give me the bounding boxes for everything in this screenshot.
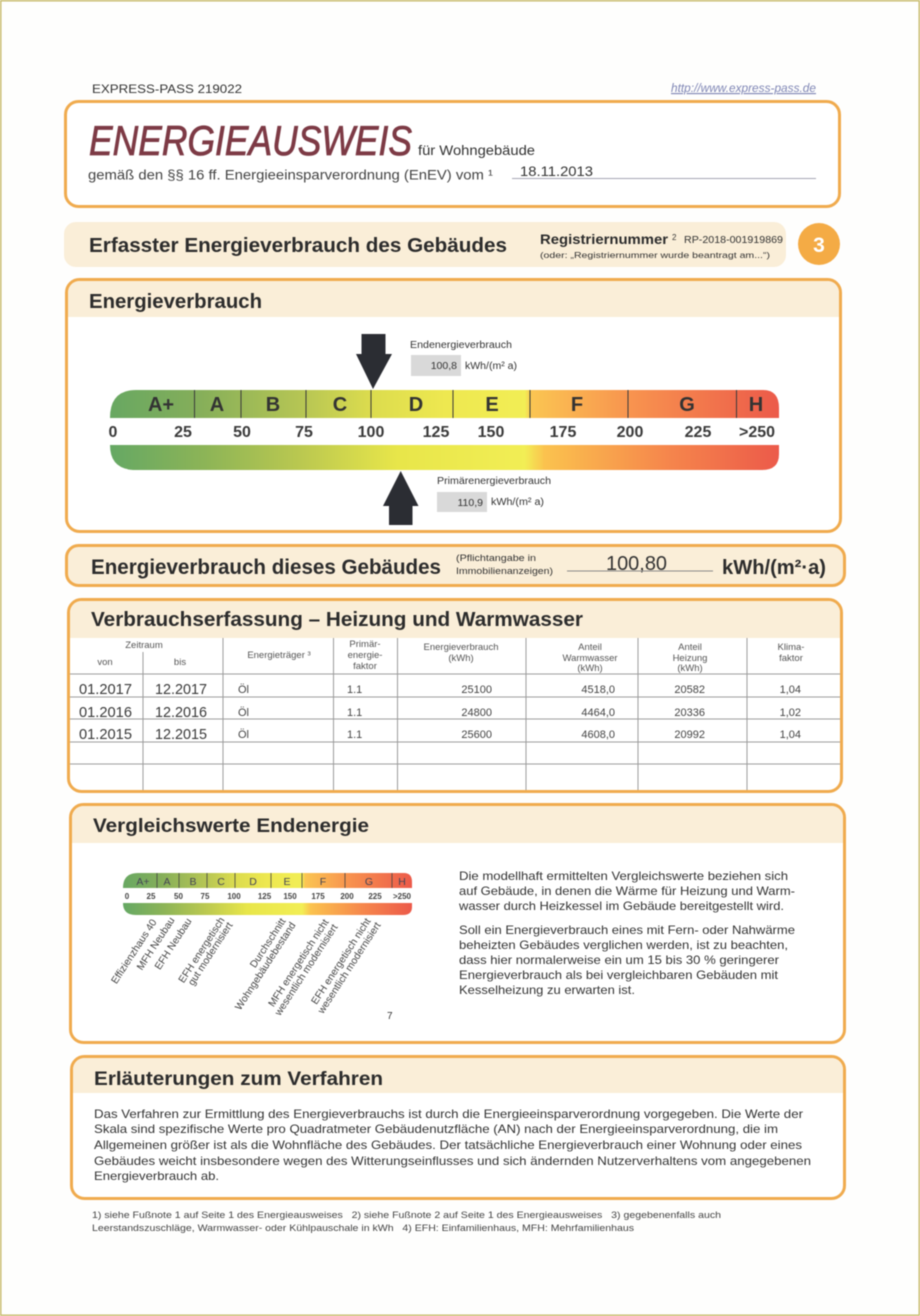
table row 2015: 12.2015 <box>155 726 207 743</box>
energy class bar: F <box>571 394 583 416</box>
footnotes <box>92 1210 721 1234</box>
rotated comparison labels: EFH energetisch <box>177 916 228 985</box>
table header: (kWh) <box>577 663 603 674</box>
mini class bar: G <box>365 876 373 888</box>
table header: Heizung <box>673 653 707 664</box>
scale numbers: 75 <box>295 424 313 441</box>
heading: Verbrauchserfassung: Verbrauchserfassung – Heizung und Warmwasser <box>91 608 583 631</box>
table grid <box>70 638 840 790</box>
registration number: Registriernummer <box>540 231 669 247</box>
text: comparison explanation: auf Gebäude, in denen die Wärme für Heizung und Warm- <box>459 885 795 898</box>
text: comparison explanation: dass hier normalerweise ein um 15 bis 30 % geringerer <box>459 954 779 967</box>
table row 2016: 01.2016 <box>79 704 132 721</box>
gradient bar <box>110 445 779 470</box>
label: Endenergieverbrauch value: 100,8 <box>431 360 457 372</box>
footnote marker: 7 <box>387 1011 393 1022</box>
mini class bar: E <box>283 876 291 888</box>
table row 2016: 24800 <box>461 707 492 719</box>
arrow: Endenergie down <box>356 334 392 389</box>
table header: Anteil <box>578 642 602 653</box>
mini class bar: C <box>217 876 225 888</box>
heading: Erläuterungen: Erläuterungen zum Verfahren <box>94 1068 383 1090</box>
panel: Energieverbrauch dieses Gebäudes <box>66 546 844 586</box>
rotated comparison labels: Durchschnitt <box>248 917 289 970</box>
table row 2017: Öl <box>238 684 249 696</box>
table row 2016: 20336 <box>674 707 705 719</box>
text: comparison explanation: Kesselheizung zu erwarten ist. <box>459 984 635 997</box>
table row 2015: 20992 <box>674 729 705 741</box>
heading: Energieausweis: ENERGIEAUSWEIS <box>89 117 412 164</box>
page number badge <box>798 223 840 265</box>
table row 2016: 1,02 <box>780 707 801 719</box>
text: procedure explanation: Allgemeinen größer ist als die Wohnfläche des Gebäudes. Der tatsächliche Energieverbrauch einer Wohnung oder eines <box>94 1138 802 1152</box>
energy class bar: A+ <box>148 394 174 416</box>
table header: Energieverbrauch <box>424 642 498 653</box>
table header: faktor <box>779 653 803 664</box>
mini gradient bar <box>123 903 412 915</box>
mini class bar: A <box>163 876 171 888</box>
rotated comparison labels <box>110 916 384 1019</box>
scale numbers: 0 <box>109 424 118 441</box>
rotated comparison labels: EFH energetisch nicht <box>310 917 374 1007</box>
value: 100,80: 100,80 <box>606 553 667 575</box>
page header: pass number and link: EXPRESS-PASS 219022 <box>92 82 242 96</box>
table header: (kWh) <box>448 653 474 664</box>
table header: bis <box>174 657 186 668</box>
table row 2017: 20582 <box>674 684 705 696</box>
text: procedure explanation: Das Verfahren zur Ermittlung des Energieverbrauchs ist durch die Energieeinsparverordnung vorgegeben. Die Werte der <box>94 1107 803 1121</box>
table row 2017: 25100 <box>461 684 492 696</box>
table row 2016: 4464,0 <box>581 707 615 719</box>
table row 2015 <box>79 726 801 743</box>
scale numbers: 50 <box>233 424 251 441</box>
table row 2017: 01.2017 <box>79 681 132 698</box>
page number badge: 3 <box>813 234 825 257</box>
energy class bar: C <box>333 394 347 416</box>
table row 2017: 12.2017 <box>155 681 207 698</box>
note: Pflichtangabe: Immobilienanzeigen) <box>456 566 553 576</box>
table row 2016: Öl <box>238 707 249 719</box>
scale numbers: 200 <box>617 424 643 441</box>
text: comparison explanation: beheizten Gebäudes verglichen werden, ist zu beachten, <box>459 939 788 952</box>
table header: Energieträger ³ <box>247 650 311 661</box>
table header <box>97 639 804 674</box>
rotated comparison labels: EFH Neubau <box>153 917 195 972</box>
mini class bar: B <box>189 876 197 888</box>
panel: Energieverbrauch scale <box>66 280 840 532</box>
panel: Verbrauchserfassung table <box>68 600 842 792</box>
registration number <box>540 231 783 260</box>
note: Pflichtangabe <box>456 553 553 576</box>
table header: Warmwasser <box>562 653 618 664</box>
scale numbers: 125 <box>423 424 449 441</box>
mini class bar: A+ <box>136 876 150 888</box>
note: Pflichtangabe: (Pflichtangabe in <box>456 553 536 563</box>
mini class bar: F <box>320 876 326 888</box>
scale numbers: 25 <box>174 424 192 441</box>
text: comparison explanation: Die modellhaft ermittelten Vergleichswerte beziehen sich <box>459 870 788 883</box>
label: Primärenergieverbrauch value: Primärenergieverbrauch <box>437 476 551 487</box>
panel: Erläuterungen zum Verfahren <box>72 1056 844 1198</box>
mini scale numbers: 25 <box>147 892 156 901</box>
page header: pass number and link <box>92 82 816 96</box>
text: comparison explanation <box>458 870 795 997</box>
table header: Zeitraum <box>125 640 163 651</box>
rotated comparison labels: Effizienzhaus 40 <box>110 917 160 986</box>
mini scale numbers: 225 <box>368 892 382 901</box>
table row 2015: 01.2015 <box>79 726 132 743</box>
label: Endenergieverbrauch value: Endenergieverbrauch <box>410 340 512 351</box>
rotated comparison labels: wesentlich modernisiert <box>316 921 384 1017</box>
table header: Anteil <box>678 642 702 653</box>
text: procedure explanation: Energieverbrauch ab. <box>94 1169 219 1183</box>
mini scale numbers: 100 <box>227 892 241 901</box>
text: procedure explanation <box>94 1107 811 1183</box>
table header: Primär- <box>349 639 381 650</box>
mini scale numbers: >250 <box>393 892 412 901</box>
scale numbers: >250 <box>739 424 775 441</box>
footnotes: Leerstandszuschläge, Warmwasser- oder Kühlpauschale in kWh 4) EFH: Einfamilienhaus, MFH: Mehrfamilienhaus <box>92 1223 634 1234</box>
table row 2016: 12.2016 <box>155 704 207 721</box>
mini scale numbers: 125 <box>258 892 272 901</box>
energy class bar: A <box>210 394 224 416</box>
energy class bar: D <box>409 394 423 416</box>
energy class bar: E <box>485 394 499 416</box>
mini scale numbers: 150 <box>283 892 297 901</box>
mini scale numbers: 75 <box>201 892 210 901</box>
scale numbers: 150 <box>478 424 504 441</box>
heading: Erfasster Energieverbrauch des Gebäudes: Erfasster Energieverbrauch des Gebäudes <box>89 235 507 257</box>
heading: building consumption: Energieverbrauch dieses Gebäudes <box>91 556 441 579</box>
table row 2017: 4518,0 <box>581 684 615 696</box>
mini class bar <box>123 873 412 888</box>
panel: title <box>66 102 840 206</box>
registration number: 2 <box>672 233 677 242</box>
table row 2016 <box>79 704 801 721</box>
energy class bar: G <box>679 394 695 416</box>
scale numbers: 225 <box>685 424 711 441</box>
scale numbers <box>109 424 775 441</box>
rotated comparison labels: gut modernisiert <box>187 921 236 988</box>
legal reference line: gemäß den §§ 16 ff. Energieeinsparverordnung (EnEV) vom ¹ <box>88 168 494 182</box>
table row 2015: 4608,0 <box>581 729 615 741</box>
energy class bar <box>110 390 779 418</box>
rotated comparison labels: MFH energetisch nicht <box>267 918 332 1009</box>
text: comparison explanation: wasser durch Heizkessel im Gebäude bereitgestellt wird. <box>458 900 784 913</box>
table row 2015: Öl <box>238 729 249 741</box>
label: Primärenergieverbrauch value <box>437 476 551 512</box>
scale numbers: 100 <box>358 424 384 441</box>
mini scale numbers: 175 <box>311 892 325 901</box>
issue date: 18.11.2013 <box>520 163 593 179</box>
text: procedure explanation: Gebäudes weicht insbesondere wegen des Witterungseinflusses und sich ändernden Nutzerverhaltens vom angegebenen <box>94 1154 811 1168</box>
mini class bar: H <box>398 876 406 888</box>
registration number: (oder: „Registriernummer wurde beantragt am...“) <box>540 250 770 260</box>
table row 2015: 1,04 <box>780 729 801 741</box>
table header: Klima- <box>778 642 804 653</box>
scale numbers: 175 <box>550 424 576 441</box>
label: Endenergieverbrauch value: kWh/(m² a) <box>465 361 517 372</box>
heading: Energieverbrauch: Energieverbrauch <box>89 291 262 313</box>
label: Primärenergieverbrauch value: 110,9 <box>458 497 483 509</box>
subtitle: für Wohngebäude: für Wohngebäude <box>418 143 535 158</box>
label: Endenergieverbrauch value <box>410 340 517 376</box>
table header: (kWh) <box>677 663 703 674</box>
table row 2016: 1.1 <box>347 707 362 719</box>
rotated comparison labels: MFH Neubau <box>135 916 178 972</box>
panel: Vergleichswerte Endenergie <box>70 804 844 1042</box>
table row 2015: 1.1 <box>347 729 362 741</box>
energy class bar: H <box>749 394 763 416</box>
heading: Vergleichswerte: Vergleichswerte Endenergie <box>93 815 369 837</box>
table header: faktor <box>353 661 377 672</box>
mini scale numbers: 200 <box>340 892 354 901</box>
text: procedure explanation: Skala sind spezifische Werte pro Quadratmeter Gebäudenutzfläche (AN) nach der Energieeinsparverordnung, die im <box>94 1122 778 1136</box>
footnotes: 1) siehe Fußnote 1 auf Seite 1 des Energieausweises 2) siehe Fußnote 2 auf Seite 1 des Energieausweises 3) gegebenenfalls auch <box>92 1210 721 1221</box>
table row 2015: 25600 <box>461 729 492 741</box>
text: comparison explanation: Soll ein Energieverbrauch eines mit Fern- oder Nahwärme <box>459 924 795 937</box>
page header: pass number and link: http://www.express-pass.de <box>671 83 816 95</box>
table row 2017: 1.1 <box>347 684 362 696</box>
rotated comparison labels: wesentlich modernisiert <box>273 923 341 1019</box>
table row 2017 <box>79 681 801 698</box>
label: Primärenergieverbrauch value: kWh/(m² a) <box>491 497 544 508</box>
mini scale numbers <box>125 892 412 901</box>
table header: von <box>97 657 113 668</box>
rotated comparison labels: Wohngebäudebestand <box>234 920 299 1012</box>
mini class bar: D <box>249 876 257 888</box>
registration number: RP-2018-001919869 <box>684 235 783 246</box>
table header: energie- <box>348 650 382 661</box>
unit: kWh/(m²·a) <box>722 557 826 579</box>
table row 2017: 1,04 <box>780 684 801 696</box>
energy class bar: B <box>266 394 280 416</box>
mini scale numbers: 50 <box>174 892 183 901</box>
arrow: Primärenergie up <box>383 471 418 525</box>
mini scale numbers: 0 <box>125 892 130 901</box>
text: comparison explanation: Energieverbrauch als bei vergleichbaren Gebäuden mit <box>459 969 779 982</box>
section band: Erfasster Energieverbrauch <box>64 222 786 267</box>
